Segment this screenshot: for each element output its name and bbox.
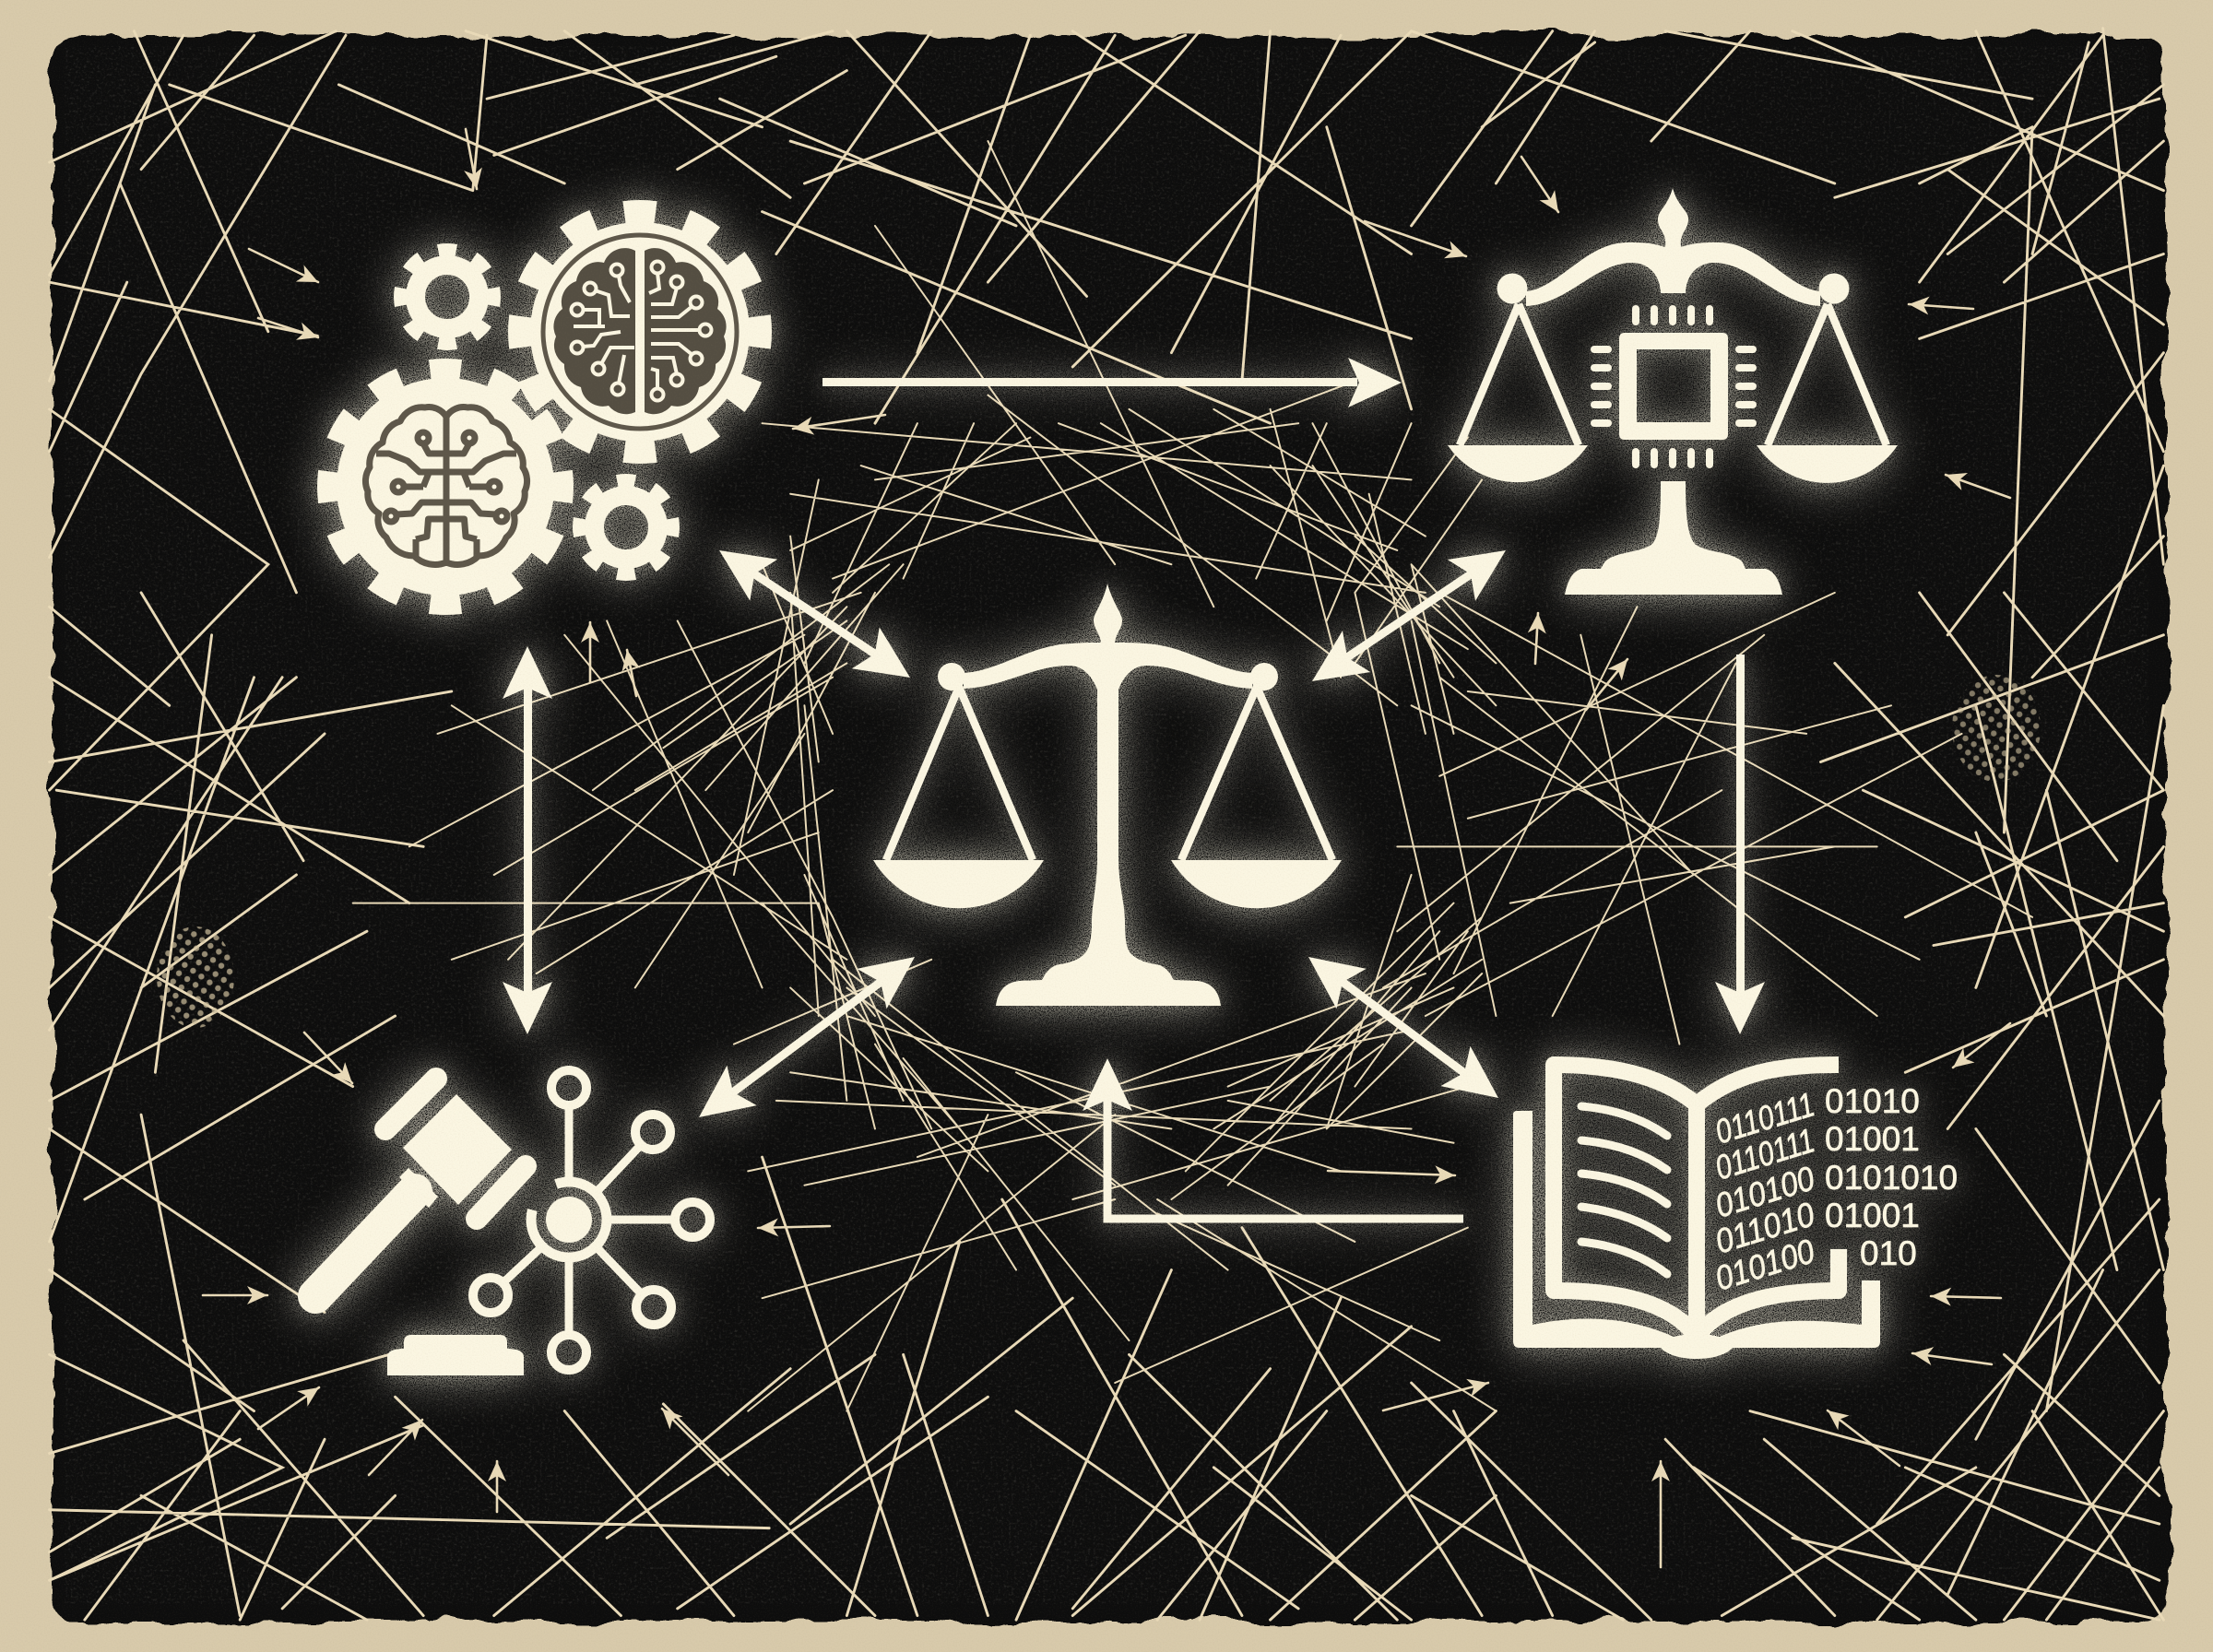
network hub and nodes <box>473 1070 710 1370</box>
gear ring <box>543 235 737 429</box>
book pages <box>1554 1065 1839 1337</box>
arrow: gears to gavel double-headed <box>503 646 552 1034</box>
right pan <box>1171 663 1342 908</box>
arrow: chip scale to centre double-headed <box>1298 530 1520 702</box>
chip scale stand <box>1565 481 1782 595</box>
gavel <box>315 1079 526 1375</box>
book cover <box>1513 1111 1880 1359</box>
brain circuits <box>572 262 712 400</box>
microchip <box>1591 305 1757 468</box>
icon: gears with brains <box>327 212 760 605</box>
icon: gavel and network <box>315 1070 710 1375</box>
small inward arrows <box>203 129 2010 1567</box>
icon: balance scale with chip <box>1448 188 1898 595</box>
small gear top <box>400 250 494 344</box>
chip scale right pan <box>1757 273 1898 483</box>
arrow: chip scale to book <box>1715 655 1765 1034</box>
binary digits: 0101010 <box>1825 1159 1958 1197</box>
binary digits: 0110111 <box>1710 1085 1819 1151</box>
binary digits <box>1710 1082 1958 1298</box>
binary digits: 0110111 <box>1710 1121 1819 1187</box>
halftone patch right <box>1952 675 2041 782</box>
small gear bottom <box>579 480 673 574</box>
binary digits: 010100 <box>1710 1232 1819 1298</box>
halftone patch left <box>157 926 234 1028</box>
arrow: gavel to centre double-headed <box>684 937 929 1138</box>
binary digits: 010100 <box>1710 1159 1819 1225</box>
binary digits: 010 <box>1860 1234 1917 1272</box>
binary digits: 01001 <box>1825 1120 1920 1158</box>
glowing icons layer <box>315 188 1958 1375</box>
brain lobes <box>553 248 727 414</box>
large gear lower-left with brain outline <box>327 369 563 605</box>
arrow: book to centre double-headed <box>1294 937 1513 1118</box>
arrow: book to centre elbow <box>1083 1058 1463 1219</box>
binary digits: 01001 <box>1825 1197 1920 1234</box>
large gear upper-right with brain <box>520 212 760 452</box>
binary digits: 011010 <box>1710 1195 1819 1261</box>
brain outline with circuits <box>365 407 527 564</box>
left pan <box>873 663 1044 908</box>
binary digits: 01010 <box>1825 1082 1920 1120</box>
icon: central balance scale <box>873 584 1342 1006</box>
arrow: gears to chip scale <box>822 358 1402 407</box>
chip scale left pan <box>1448 273 1588 482</box>
left page text lines <box>1581 1106 1667 1274</box>
arrow: gears to centre double-headed <box>705 530 924 698</box>
chip scale beam <box>1526 188 1820 306</box>
central scale beam, post and base <box>964 584 1252 1006</box>
icon: open book with binary <box>1513 1065 1958 1359</box>
